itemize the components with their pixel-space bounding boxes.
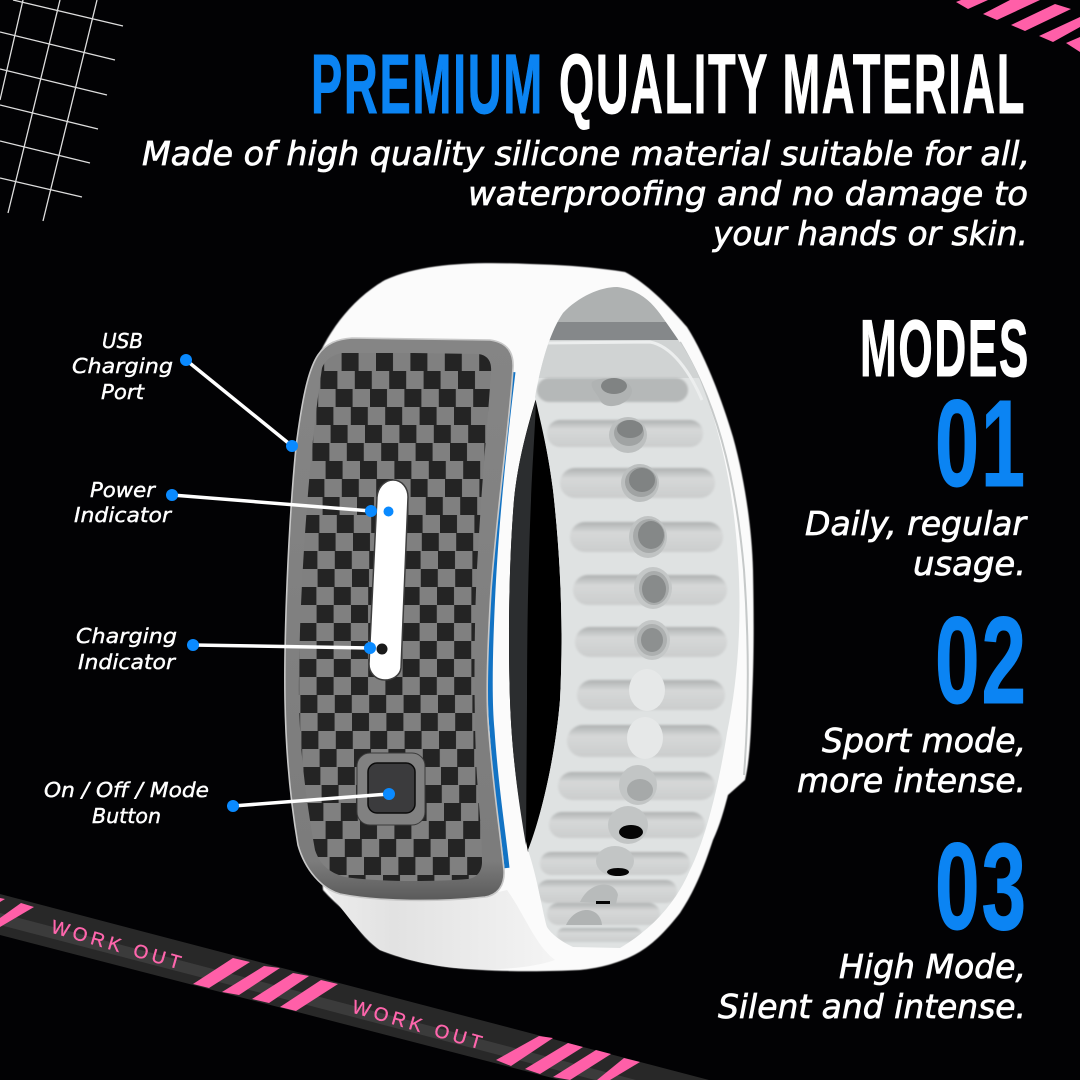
mode 01: usage. xyxy=(913,544,1026,583)
mode 02: 02 xyxy=(935,593,1028,730)
mode 03: Silent and intense. xyxy=(718,987,1026,1026)
white strap outer xyxy=(300,263,754,971)
callout: charging indicator: Charging xyxy=(76,624,177,648)
work out tape band xyxy=(0,894,709,1080)
mode button xyxy=(357,753,425,825)
title xyxy=(311,37,1026,131)
callout: on off mode button xyxy=(44,778,395,828)
callout: USB charging port: USB xyxy=(102,329,143,353)
mode 01 xyxy=(805,376,1028,583)
callout: on off mode button: Button xyxy=(92,804,161,828)
callout: power indicator xyxy=(74,478,377,527)
mode 01: 01 xyxy=(935,376,1027,513)
mode 03: 03 xyxy=(935,819,1028,956)
mode 02: more intense. xyxy=(797,761,1026,800)
blue side stripe xyxy=(490,372,513,868)
strap edge rim xyxy=(680,342,748,775)
callout: USB charging port: Charging xyxy=(72,354,173,378)
callout: power indicator: Indicator xyxy=(74,503,173,527)
mode 01: Daily, regular xyxy=(805,504,1028,543)
dark inner reflection xyxy=(509,400,536,845)
description text: waterproofing and no damage to xyxy=(468,174,1028,213)
mode 02 xyxy=(797,593,1028,800)
work out label right: WORK OUT xyxy=(350,997,485,1054)
mode 02: Sport mode, xyxy=(822,721,1026,760)
decorative grid top-left xyxy=(0,0,123,221)
callout: charging indicator: Indicator xyxy=(78,650,177,674)
work out label left: WORK OUT xyxy=(49,917,184,974)
power indicator light xyxy=(384,506,394,516)
callout: USB charging port xyxy=(72,329,298,452)
description text: Made of high quality silicone material suitable for all, xyxy=(142,134,1030,173)
carbon checker panel xyxy=(298,353,492,881)
callout: on off mode button: On / Off / Mode xyxy=(44,778,209,802)
description text: your hands or skin. xyxy=(712,214,1028,253)
mode 03: High Mode, xyxy=(839,947,1026,986)
strap ribs xyxy=(537,378,727,942)
callout: charging indicator xyxy=(76,624,376,674)
pink stripes top-right xyxy=(956,0,1080,52)
callout: USB charging port: Port xyxy=(101,380,145,404)
description text xyxy=(142,134,1030,253)
title: PREMIUM xyxy=(311,37,544,131)
gap inside band xyxy=(509,395,562,852)
metal bezel xyxy=(285,338,513,900)
strap peg holes xyxy=(566,378,672,925)
mode 03 xyxy=(718,819,1028,1026)
smart wristband product xyxy=(284,262,754,972)
charging indicator light xyxy=(376,644,388,654)
indicator capsule xyxy=(369,480,408,680)
lower strap shading xyxy=(325,888,555,969)
inner strap face xyxy=(528,287,740,948)
callout: power indicator: Power xyxy=(90,478,157,502)
